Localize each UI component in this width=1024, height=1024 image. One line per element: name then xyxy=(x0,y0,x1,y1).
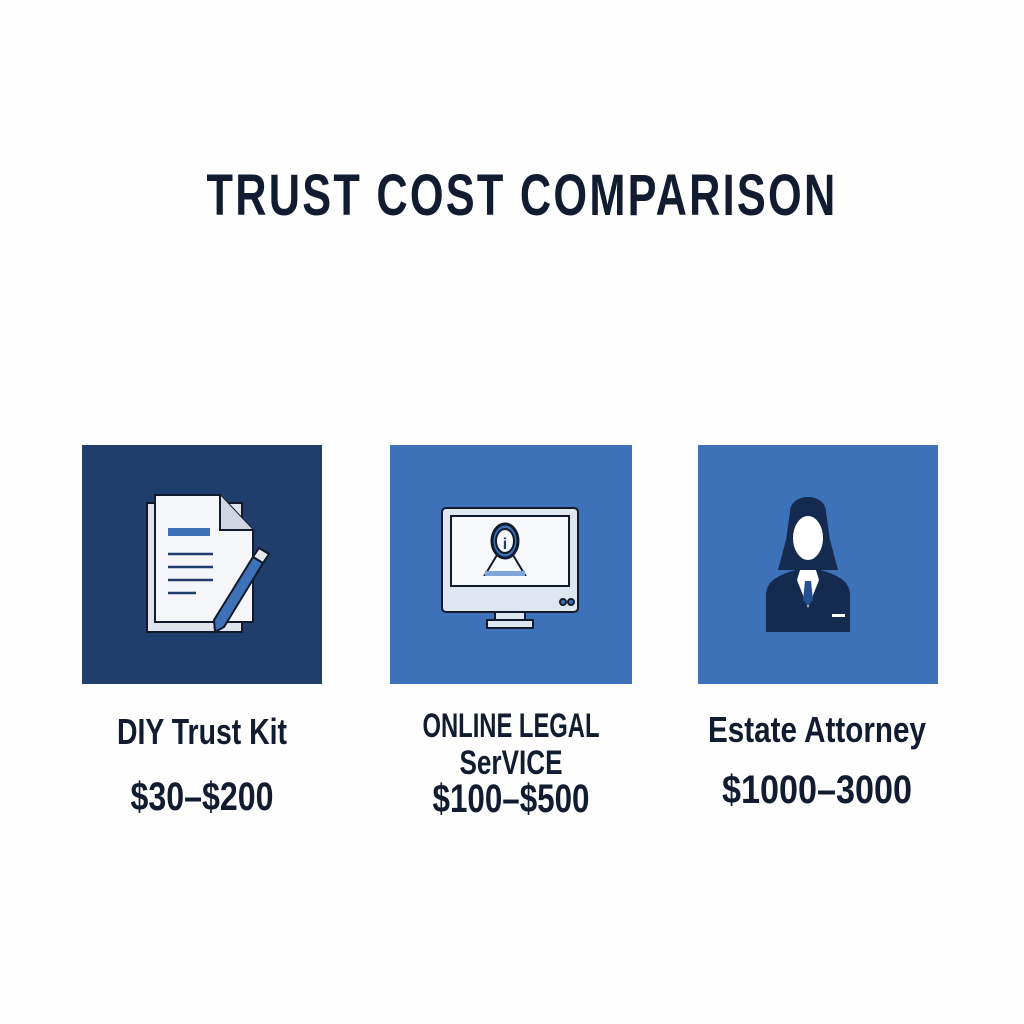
icon: attorney person xyxy=(766,497,850,632)
icon: computer monitor: i xyxy=(503,536,507,553)
panel: online legal service xyxy=(390,445,632,684)
text block: online: SerVICE xyxy=(460,744,562,782)
icon: computer monitor xyxy=(442,508,578,628)
text block: DIY xyxy=(117,711,287,819)
text block: DIY: DIY Trust Kit xyxy=(117,711,287,752)
text block: online xyxy=(422,707,600,821)
text block: attorney: Estate Attorney xyxy=(708,709,926,750)
text block: attorney: $1000–3000 xyxy=(722,768,912,812)
text block: online: ONLINE LEGAL xyxy=(422,707,600,745)
text block: DIY: $30–$200 xyxy=(130,775,274,819)
text block: attorney xyxy=(708,709,926,812)
panel: estate attorney xyxy=(698,445,938,684)
text block: online: $100–$500 xyxy=(432,777,590,821)
icon: document with pen xyxy=(147,495,269,632)
panel: DIY trust kit xyxy=(82,445,322,684)
